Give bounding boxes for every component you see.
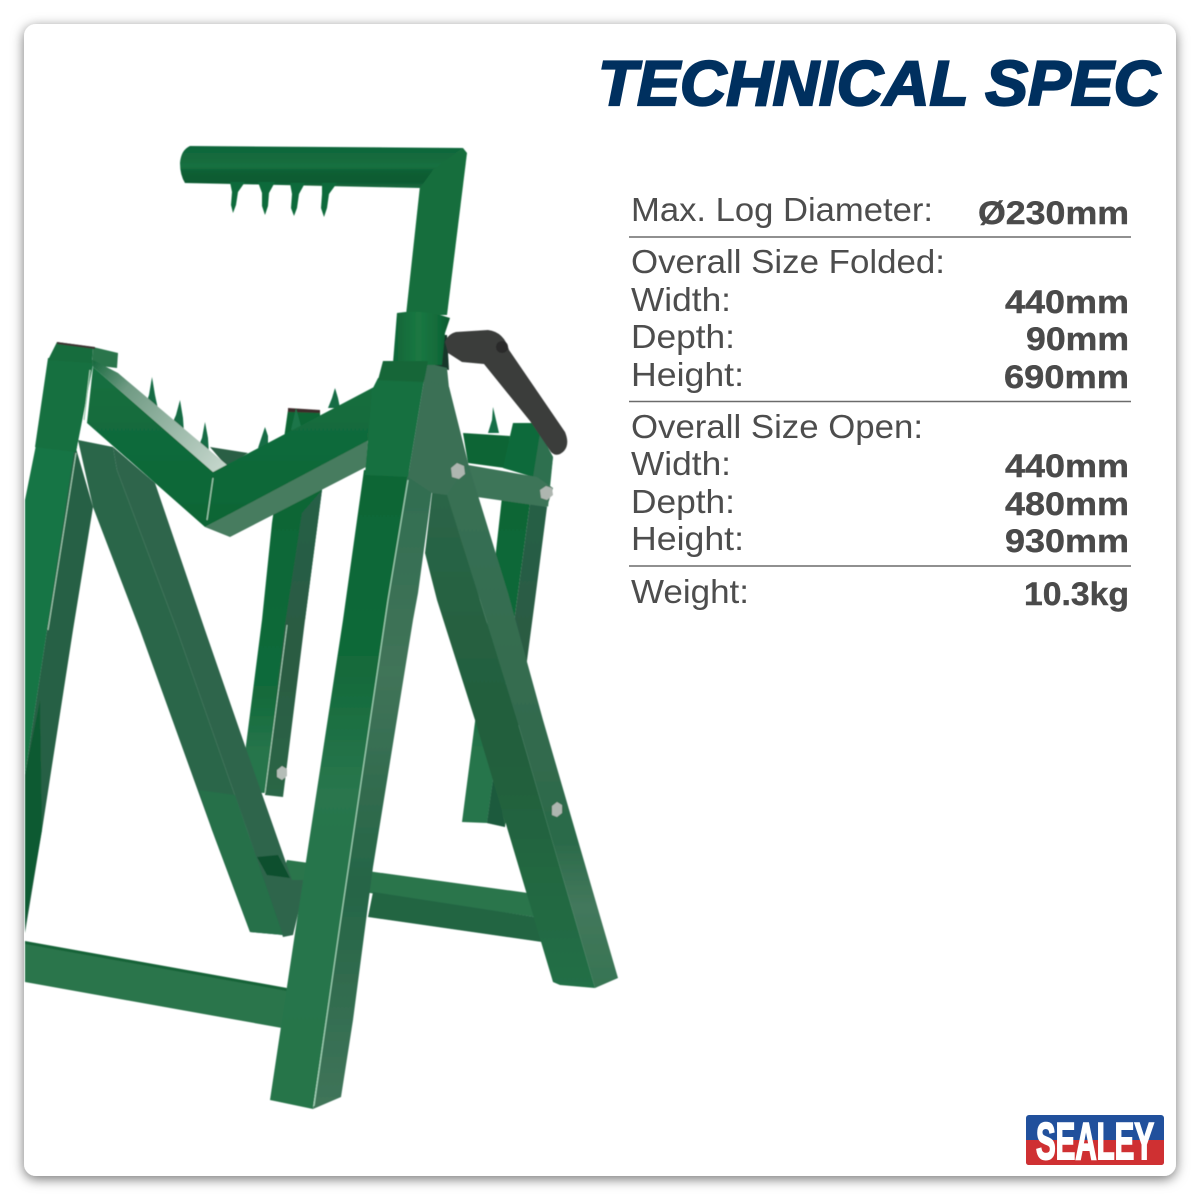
spec: overall size open: Depth: [631, 483, 735, 520]
spec: overall size open: Width: [631, 445, 731, 482]
spec: overall size open: Overall Size Open: [631, 408, 923, 445]
spec: overall size folded: 90mm [1026, 321, 1129, 357]
back centre post [240, 408, 322, 797]
spec: overall size folded [631, 243, 1129, 395]
brace lower colour overlay [199, 790, 283, 935]
pivot plate top [424, 363, 449, 388]
spec: overall size folded: Height: [631, 356, 744, 393]
spec: overall size folded: Width: [631, 281, 731, 318]
left leg [25, 440, 93, 933]
spec: overall size open: 440mm [1005, 448, 1129, 484]
spec: max log diameter: Max. Log Diameter: [631, 191, 933, 228]
upper handle vertical tube [406, 148, 467, 315]
weld beads on V-beam [84, 370, 213, 520]
brace rear face [113, 447, 306, 937]
back lower crossbar [280, 860, 542, 942]
rear link behind V-beam [210, 447, 248, 467]
spec: max log diameter: Ø230mm [978, 195, 1129, 231]
collar [393, 312, 450, 365]
V-beam underside [205, 438, 368, 537]
bolts [451, 463, 562, 817]
spec: overall size open: 480mm [1005, 486, 1129, 522]
spec: overall size open: 930mm [1005, 523, 1129, 559]
front lower crossbar [25, 941, 287, 1028]
right diagonal leg outer face [432, 387, 618, 988]
spike on back centre post [291, 408, 302, 430]
spec: weight [631, 573, 1129, 612]
back upper bar and post head [463, 423, 553, 507]
spec: weight: 10.3kg [1024, 576, 1129, 612]
brace front face [78, 440, 283, 935]
title: TECHNICAL SPEC [598, 49, 1162, 119]
main leg sleeve [365, 361, 428, 477]
V-beam rear face [93, 360, 227, 472]
shadow behind collar [428, 335, 449, 370]
spec: max log diameter [631, 191, 1129, 231]
clamp knob handle [445, 330, 567, 455]
spike on rear bar [488, 407, 499, 433]
back right post [462, 488, 547, 827]
spec: overall size folded: 690mm [1004, 359, 1129, 395]
brace foot shadow [257, 855, 290, 878]
handle spikes [230, 182, 337, 217]
left leg sleeve [35, 342, 118, 452]
rear crossbar plate [468, 465, 553, 507]
spec: overall size folded: 440mm [1005, 284, 1129, 320]
sleeve plate [408, 380, 468, 495]
spec: overall size folded: Overall Size Folded: [631, 243, 945, 280]
V-beam cradle [87, 367, 374, 527]
bolt and blue screw on centre post [236, 766, 287, 780]
upper handle horizontal tube [180, 146, 463, 188]
spikes on V-beam [144, 377, 340, 455]
spec: weight: Weight: [631, 573, 749, 610]
spec: overall size open [631, 408, 1129, 559]
main front leg [270, 470, 432, 1109]
spec: overall size folded: Depth: [631, 318, 735, 355]
spec: overall size open: Height: [631, 520, 744, 557]
product photo: green log stand [25, 146, 618, 1109]
right diagonal leg inner face [425, 485, 595, 988]
